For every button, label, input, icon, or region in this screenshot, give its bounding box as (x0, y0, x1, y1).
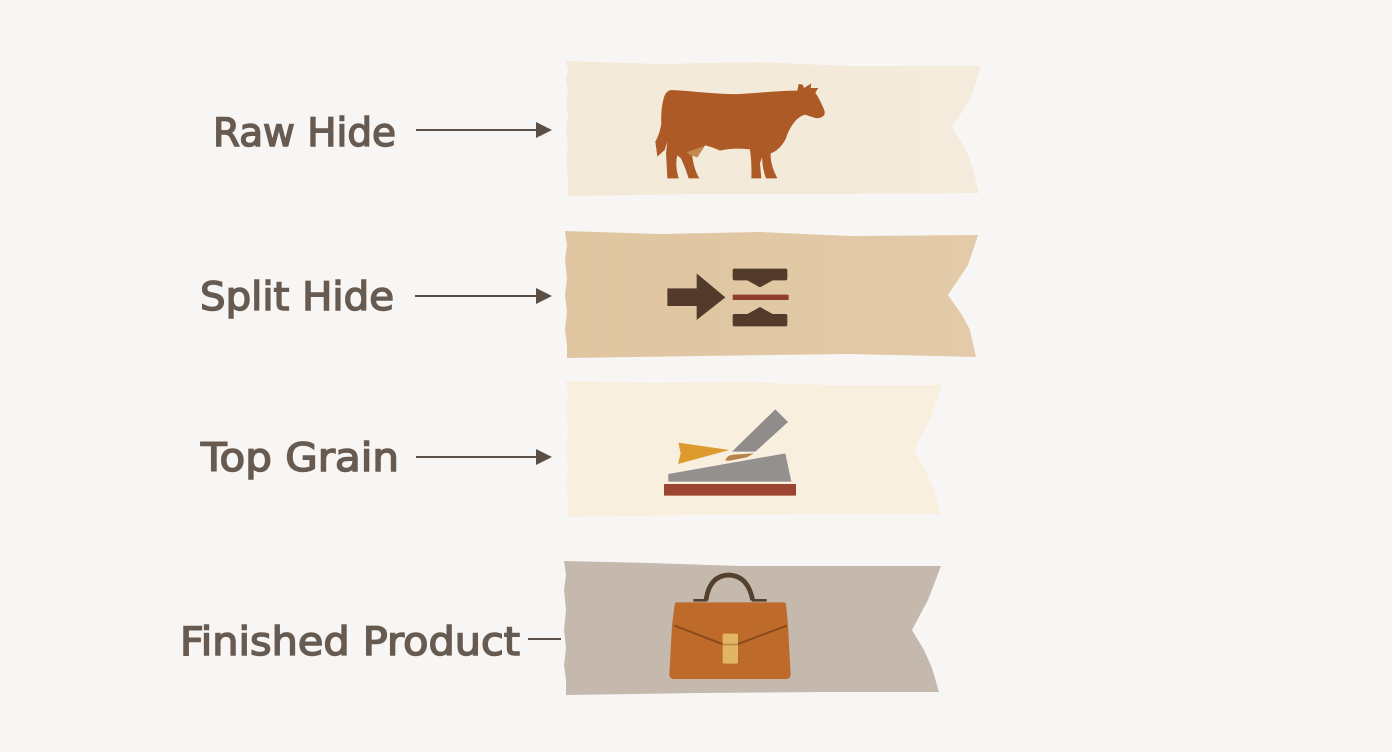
ribbon: Raw Hide (566, 61, 981, 196)
stage: Split Hide (200, 231, 978, 358)
stage: Raw Hide (213, 61, 981, 196)
icon: blade skiving leather (664, 409, 796, 496)
ribbon: Top Grain (566, 381, 942, 517)
arrow: Split Hide to ribbon (415, 288, 552, 304)
label: Finished Product: Finished Product (180, 620, 520, 665)
icon: cow (655, 83, 825, 178)
icon: splitting arrow (667, 269, 789, 326)
label: Top Grain: Top Grain (200, 436, 399, 481)
connector: Finished Product to ribbon (528, 638, 561, 640)
ribbon: Finished Product (564, 561, 941, 695)
arrow: Top Grain to ribbon (416, 449, 552, 465)
icon: briefcase (669, 575, 791, 679)
label: Split Hide: Split Hide (200, 275, 394, 320)
stage: Top Grain (200, 381, 942, 517)
label: Raw Hide: Raw Hide (213, 111, 396, 156)
arrow: Raw Hide to ribbon (416, 122, 552, 138)
stage: Finished Product (180, 561, 941, 695)
ribbon: Split Hide (565, 231, 978, 358)
